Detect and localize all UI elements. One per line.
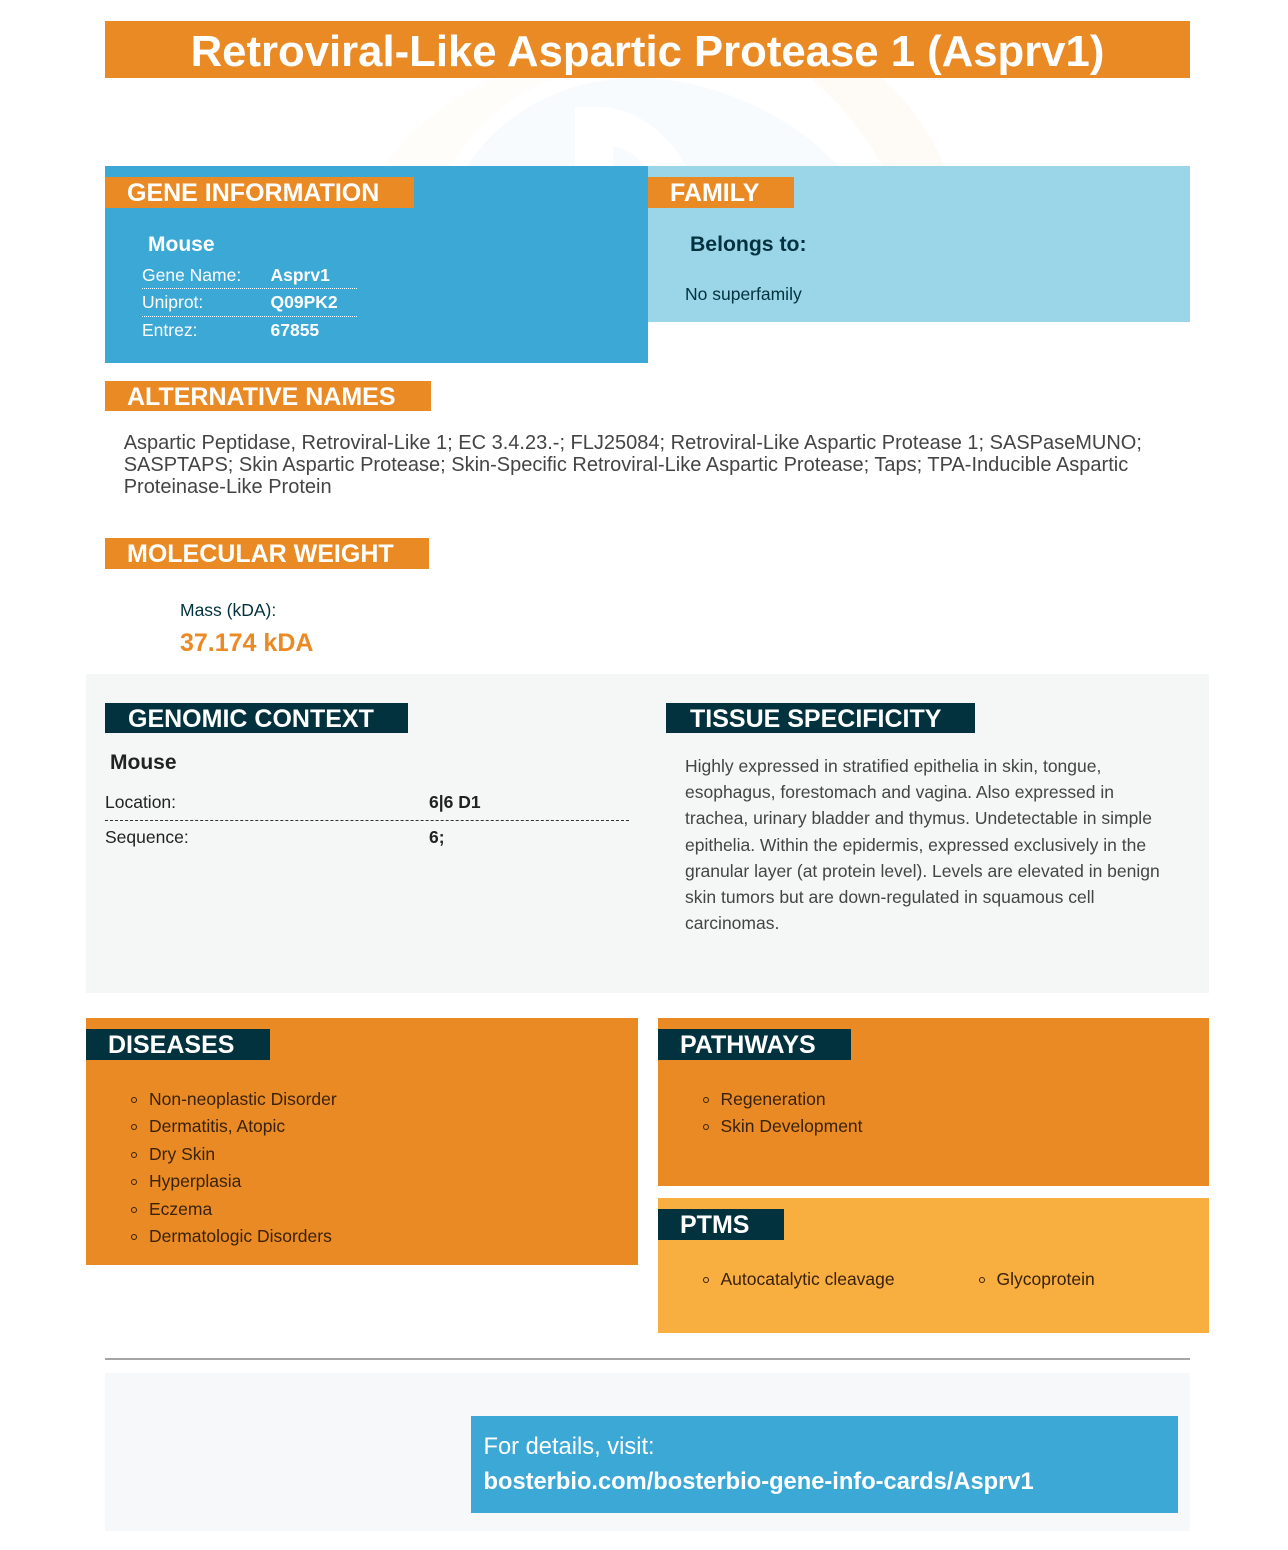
heading: genomic context: GENOMIC CONTEXT <box>128 705 374 733</box>
heading: family <box>648 177 794 208</box>
gene details table: Asprv1 <box>270 265 330 285</box>
panel: gene information <box>105 166 648 363</box>
tissue specificity text: granular layer (at protein level). Levels are elevated in benign <box>685 861 1160 881</box>
heading: molecular weight: MOLECULAR WEIGHT <box>127 540 394 568</box>
tissue specificity text: skin tumors but are down-regulated in squamous cell <box>685 887 1095 907</box>
heading: gene information: GENE INFORMATION <box>127 179 379 207</box>
pathways list: Skin Development <box>720 1116 863 1136</box>
mass value: 37.174 kDA <box>180 629 313 657</box>
heading: family: FAMILY <box>670 179 759 207</box>
panel: pathways <box>658 1018 1209 1186</box>
heading: tissue specificity: TISSUE SPECIFICITY <box>690 705 941 733</box>
genomic table <box>105 792 629 847</box>
gene details table: Entrez: <box>142 320 197 340</box>
alternative names text: Proteinase-Like Protein <box>124 476 332 498</box>
panel: footer <box>105 1373 1190 1531</box>
pathways list: Regeneration <box>720 1089 826 1109</box>
mass label: Mass (kDA): <box>180 600 276 620</box>
diseases list: Dermatitis, Atopic <box>149 1116 285 1136</box>
alternative names text: Aspartic Peptidase, Retroviral-Like 1; EC 3.4.23.-; FLJ25084; Retroviral-Like Aspartic Protease 1; SASPaseMUNO; <box>124 432 1142 454</box>
genomic table: 6; <box>429 827 445 847</box>
ptms list: Autocatalytic cleavage <box>720 1269 895 1289</box>
panel: ptms <box>658 1198 1209 1333</box>
heading: ptms: PTMS <box>680 1211 749 1239</box>
genomic table: Location: <box>105 792 176 812</box>
url: bosterbio.com/bosterbio-gene-info-cards/Asprv1 <box>484 1469 1034 1495</box>
diseases list: Hyperplasia <box>149 1171 241 1191</box>
heading: diseases: DISEASES <box>108 1031 234 1059</box>
diseases list <box>131 1089 337 1246</box>
species label: Mouse <box>148 233 215 256</box>
panel: genomic context and tissue specificity <box>86 674 1209 993</box>
watermark logo <box>360 78 980 166</box>
diseases list: Dermatologic Disorders <box>149 1226 332 1246</box>
title banner: Retroviral-Like Aspartic Protease 1 (Asprv1) <box>191 27 1104 76</box>
diseases list: Non-neoplastic Disorder <box>149 1089 337 1109</box>
genomic table: Sequence: <box>105 827 189 847</box>
tissue specificity text: esophagus, forestomach and vagina. Also expressed in <box>685 782 1114 802</box>
tissue specificity text: Highly expressed in stratified epithelia in skin, tongue, <box>685 756 1101 776</box>
diseases list: Eczema <box>149 1199 212 1219</box>
panel: family <box>648 166 1190 322</box>
footer divider <box>105 1358 1190 1360</box>
gene details table: Q09PK2 <box>270 292 338 312</box>
tissue specificity text <box>685 756 1160 933</box>
genomic table: 6|6 D1 <box>429 792 481 812</box>
belongs to label: Belongs to: <box>690 233 807 256</box>
species label: Mouse <box>110 751 177 774</box>
visit label: For details, visit: <box>484 1434 655 1460</box>
tissue specificity text: carcinomas. <box>685 913 779 933</box>
gene details table <box>142 265 357 340</box>
ptms list <box>703 1269 1095 1289</box>
ptms list: Glycoprotein <box>996 1269 1095 1289</box>
tissue specificity text: epithelia. Within the epidermis, expressed exclusively in the <box>685 835 1146 855</box>
gene details table: Uniprot: <box>142 292 203 312</box>
alternative names text <box>124 432 1142 498</box>
gene details table: 67855 <box>270 320 319 340</box>
pathways list <box>703 1089 863 1136</box>
gene details table: Gene Name: <box>142 265 241 285</box>
superfamily text: No superfamily <box>685 284 802 304</box>
heading: ptms <box>658 1209 784 1240</box>
tissue specificity text: trachea, urinary bladder and thymus. Undetectable in simple <box>685 808 1152 828</box>
panel: diseases <box>86 1018 638 1265</box>
heading: pathways: PATHWAYS <box>680 1031 816 1059</box>
diseases list: Dry Skin <box>149 1144 215 1164</box>
alternative names text: SASPTAPS; Skin Aspartic Protease; Skin-Specific Retroviral-Like Aspartic Protease; Taps; TPA-Inducible Aspartic <box>124 454 1128 476</box>
heading: pathways <box>658 1029 851 1060</box>
heading: diseases <box>86 1029 270 1060</box>
heading: alternative names: ALTERNATIVE NAMES <box>127 383 396 411</box>
callout: details link <box>471 1416 1178 1513</box>
